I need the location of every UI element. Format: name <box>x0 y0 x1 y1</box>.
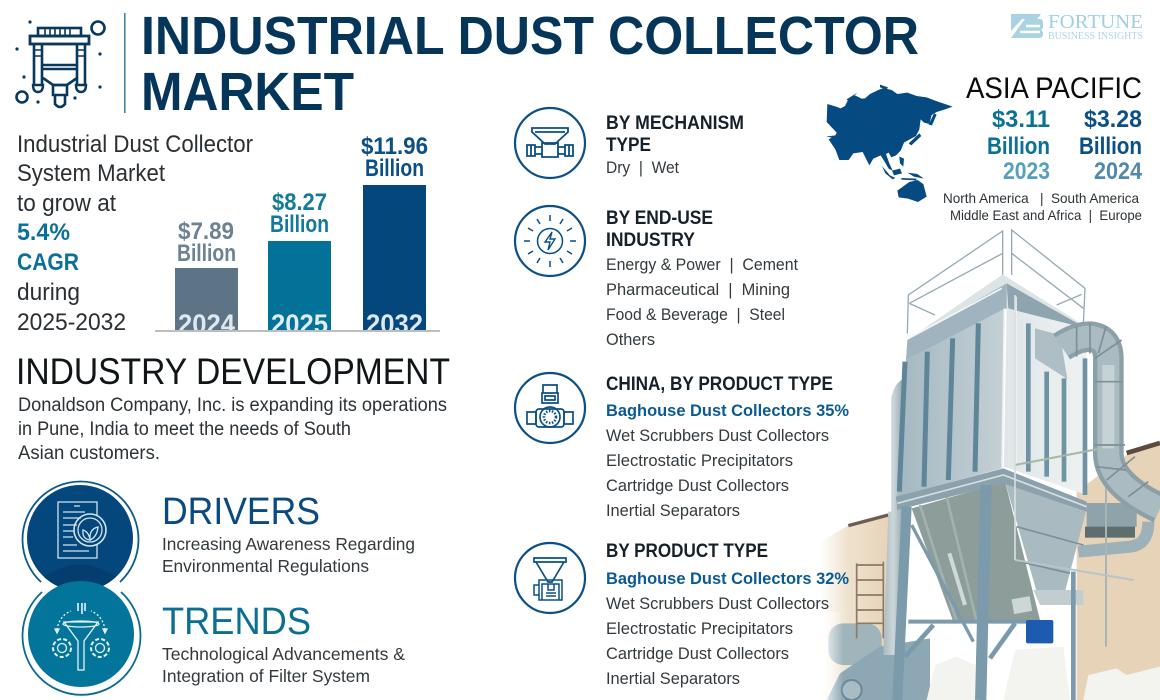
background machinery <box>820 562 930 700</box>
panel: by end-use industry: INDUSTRY <box>606 230 695 251</box>
panel: trends <box>162 601 405 686</box>
intro text: market growth: CAGR <box>17 249 79 276</box>
panel: china by product type: Inertial Separators <box>606 501 740 520</box>
panel: drivers <box>162 491 415 576</box>
bar: 2032: 2032 <box>366 309 423 339</box>
heading: industry development: INDUSTRY DEVELOPMENT <box>16 351 450 392</box>
panel: by end-use industry: Pharmaceutical | Mining <box>606 280 790 299</box>
panel: drivers: DRIVERS <box>162 491 320 533</box>
text block: industry development: in Pune, India to meet the needs of South <box>18 419 351 440</box>
text block: other regions: North America | South America <box>943 190 1139 206</box>
bar chart: market size <box>155 133 440 339</box>
panel: china by product type: Wet Scrubbers Dust Collectors <box>606 426 829 445</box>
intro text: market growth: 2025-2032 <box>17 309 126 336</box>
collector right face <box>1004 308 1087 495</box>
panel: drivers: Increasing Awareness Regarding <box>162 534 415 554</box>
bar: 2024: 2024 <box>178 309 235 339</box>
panel: trends: Integration of Filter System <box>162 666 370 686</box>
title <box>141 6 919 122</box>
bar: 2032: Billion <box>365 155 424 182</box>
icon: dust collector connector <box>15 20 104 107</box>
intro text: market growth: to grow at <box>17 190 116 217</box>
panel: china by product type: CHINA, BY PRODUCT TYPE <box>606 374 833 395</box>
rear ducts <box>1078 478 1148 647</box>
bar: 2024: Billion <box>177 240 236 267</box>
bar: 2024 <box>175 218 238 339</box>
panel: by product type: Wet Scrubbers Dust Collectors <box>606 594 829 613</box>
text block: industry development: Asian customers. <box>18 443 160 464</box>
panel: by product type: BY PRODUCT TYPE <box>606 541 768 562</box>
collector front face <box>897 297 1016 497</box>
intro text: market growth: System Market <box>17 160 165 187</box>
panel: Asia Pacific values <box>966 72 1143 185</box>
icon: china product type <box>515 373 585 443</box>
bar: 2025: 2025 <box>271 309 328 339</box>
intro text: market growth: during <box>17 279 80 306</box>
icon: mechanism type <box>515 108 585 178</box>
panel: Asia Pacific values: 2023 <box>1003 158 1050 185</box>
panel: by mechanism type: Dry | Wet <box>606 158 679 177</box>
panel: Asia Pacific values: 2024 <box>1094 158 1143 185</box>
icon: product type <box>515 543 585 613</box>
panel: by product type: Cartridge Dust Collectors <box>606 644 789 663</box>
panel: by end-use industry <box>606 208 798 349</box>
panel: by end-use industry: BY END-USE <box>606 208 713 229</box>
panel: by end-use industry: Energy & Power | Cement <box>606 255 798 274</box>
panel: Asia Pacific values: $3.11 <box>992 106 1050 133</box>
bar: 2024: $7.89 <box>178 218 234 245</box>
panel: by mechanism type <box>606 113 744 177</box>
map: Asia Pacific <box>826 85 953 202</box>
icon: drivers circle <box>22 482 138 591</box>
panel: trends: TRENDS <box>162 601 311 643</box>
text block: industry development: Donaldson Company, Inc. is expanding its operations <box>18 395 447 416</box>
bar: 2025: Billion <box>270 211 329 238</box>
photo: industrial dust collector <box>820 230 1160 700</box>
panel: by end-use industry: Others <box>606 330 655 349</box>
panel: china by product type <box>606 374 849 520</box>
panel: china by product type: Cartridge Dust Collectors <box>606 476 789 495</box>
panel: by end-use industry: Food & Beverage | Steel <box>606 305 785 324</box>
panel: trends: Technological Advancements & <box>162 644 405 664</box>
title: INDUSTRIAL DUST COLLECTOR <box>141 6 919 66</box>
divider line <box>124 13 126 113</box>
text block: other regions: Middle East and Africa | Europe <box>950 207 1142 223</box>
bar: 2032 <box>361 133 428 339</box>
wall <box>820 443 1160 700</box>
blue valve <box>1026 620 1053 643</box>
panel: by product type: Inertial Separators <box>606 669 740 688</box>
intro text: market growth <box>17 131 253 336</box>
icon: end-use industry <box>515 206 585 276</box>
panel: drivers: Environmental Regulations <box>162 556 369 576</box>
panel: by mechanism type: BY MECHANISM <box>606 113 744 134</box>
panel: by mechanism type: TYPE <box>606 135 651 156</box>
dust bags <box>927 647 1160 700</box>
logo: Fortune Business Insights: BUSINESS INSIGHTS <box>1048 31 1143 42</box>
outlet duct <box>1062 323 1160 508</box>
ledge and hopper <box>896 295 1133 622</box>
roof rails <box>907 230 1085 333</box>
logo: Fortune Business Insights: FORTUNE <box>1048 11 1143 33</box>
title: MARKET <box>141 62 354 122</box>
icon: trends circle <box>23 581 140 695</box>
panel: by product type <box>606 541 849 688</box>
roof and top band <box>906 274 1087 360</box>
bar: 2025 <box>268 189 331 339</box>
side pipe left <box>883 379 903 655</box>
panel: by product type: Electrostatic Precipitators <box>606 619 793 638</box>
support legs <box>897 485 1073 700</box>
text block: other regions <box>943 190 1142 223</box>
panel: china by product type: Baghouse Dust Collectors 35% <box>606 401 849 420</box>
panel: Asia Pacific values: $3.28 <box>1084 106 1142 133</box>
intro text: market growth: 5.4% <box>17 219 70 246</box>
text block: industry development <box>18 395 447 464</box>
bar: 2032: $11.96 <box>361 133 428 160</box>
panel: Asia Pacific values: Billion <box>987 133 1050 160</box>
panel: china by product type: Electrostatic Precipitators <box>606 451 793 470</box>
panel: by product type: Baghouse Dust Collectors 32% <box>606 569 849 588</box>
intro text: market growth: Industrial Dust Collector <box>17 131 253 158</box>
bar: 2025: $8.27 <box>272 189 327 216</box>
logo: Fortune Business Insights <box>1011 11 1143 42</box>
panel: Asia Pacific values: ASIA PACIFIC <box>966 72 1142 105</box>
panel: Asia Pacific values: Billion <box>1079 133 1142 160</box>
